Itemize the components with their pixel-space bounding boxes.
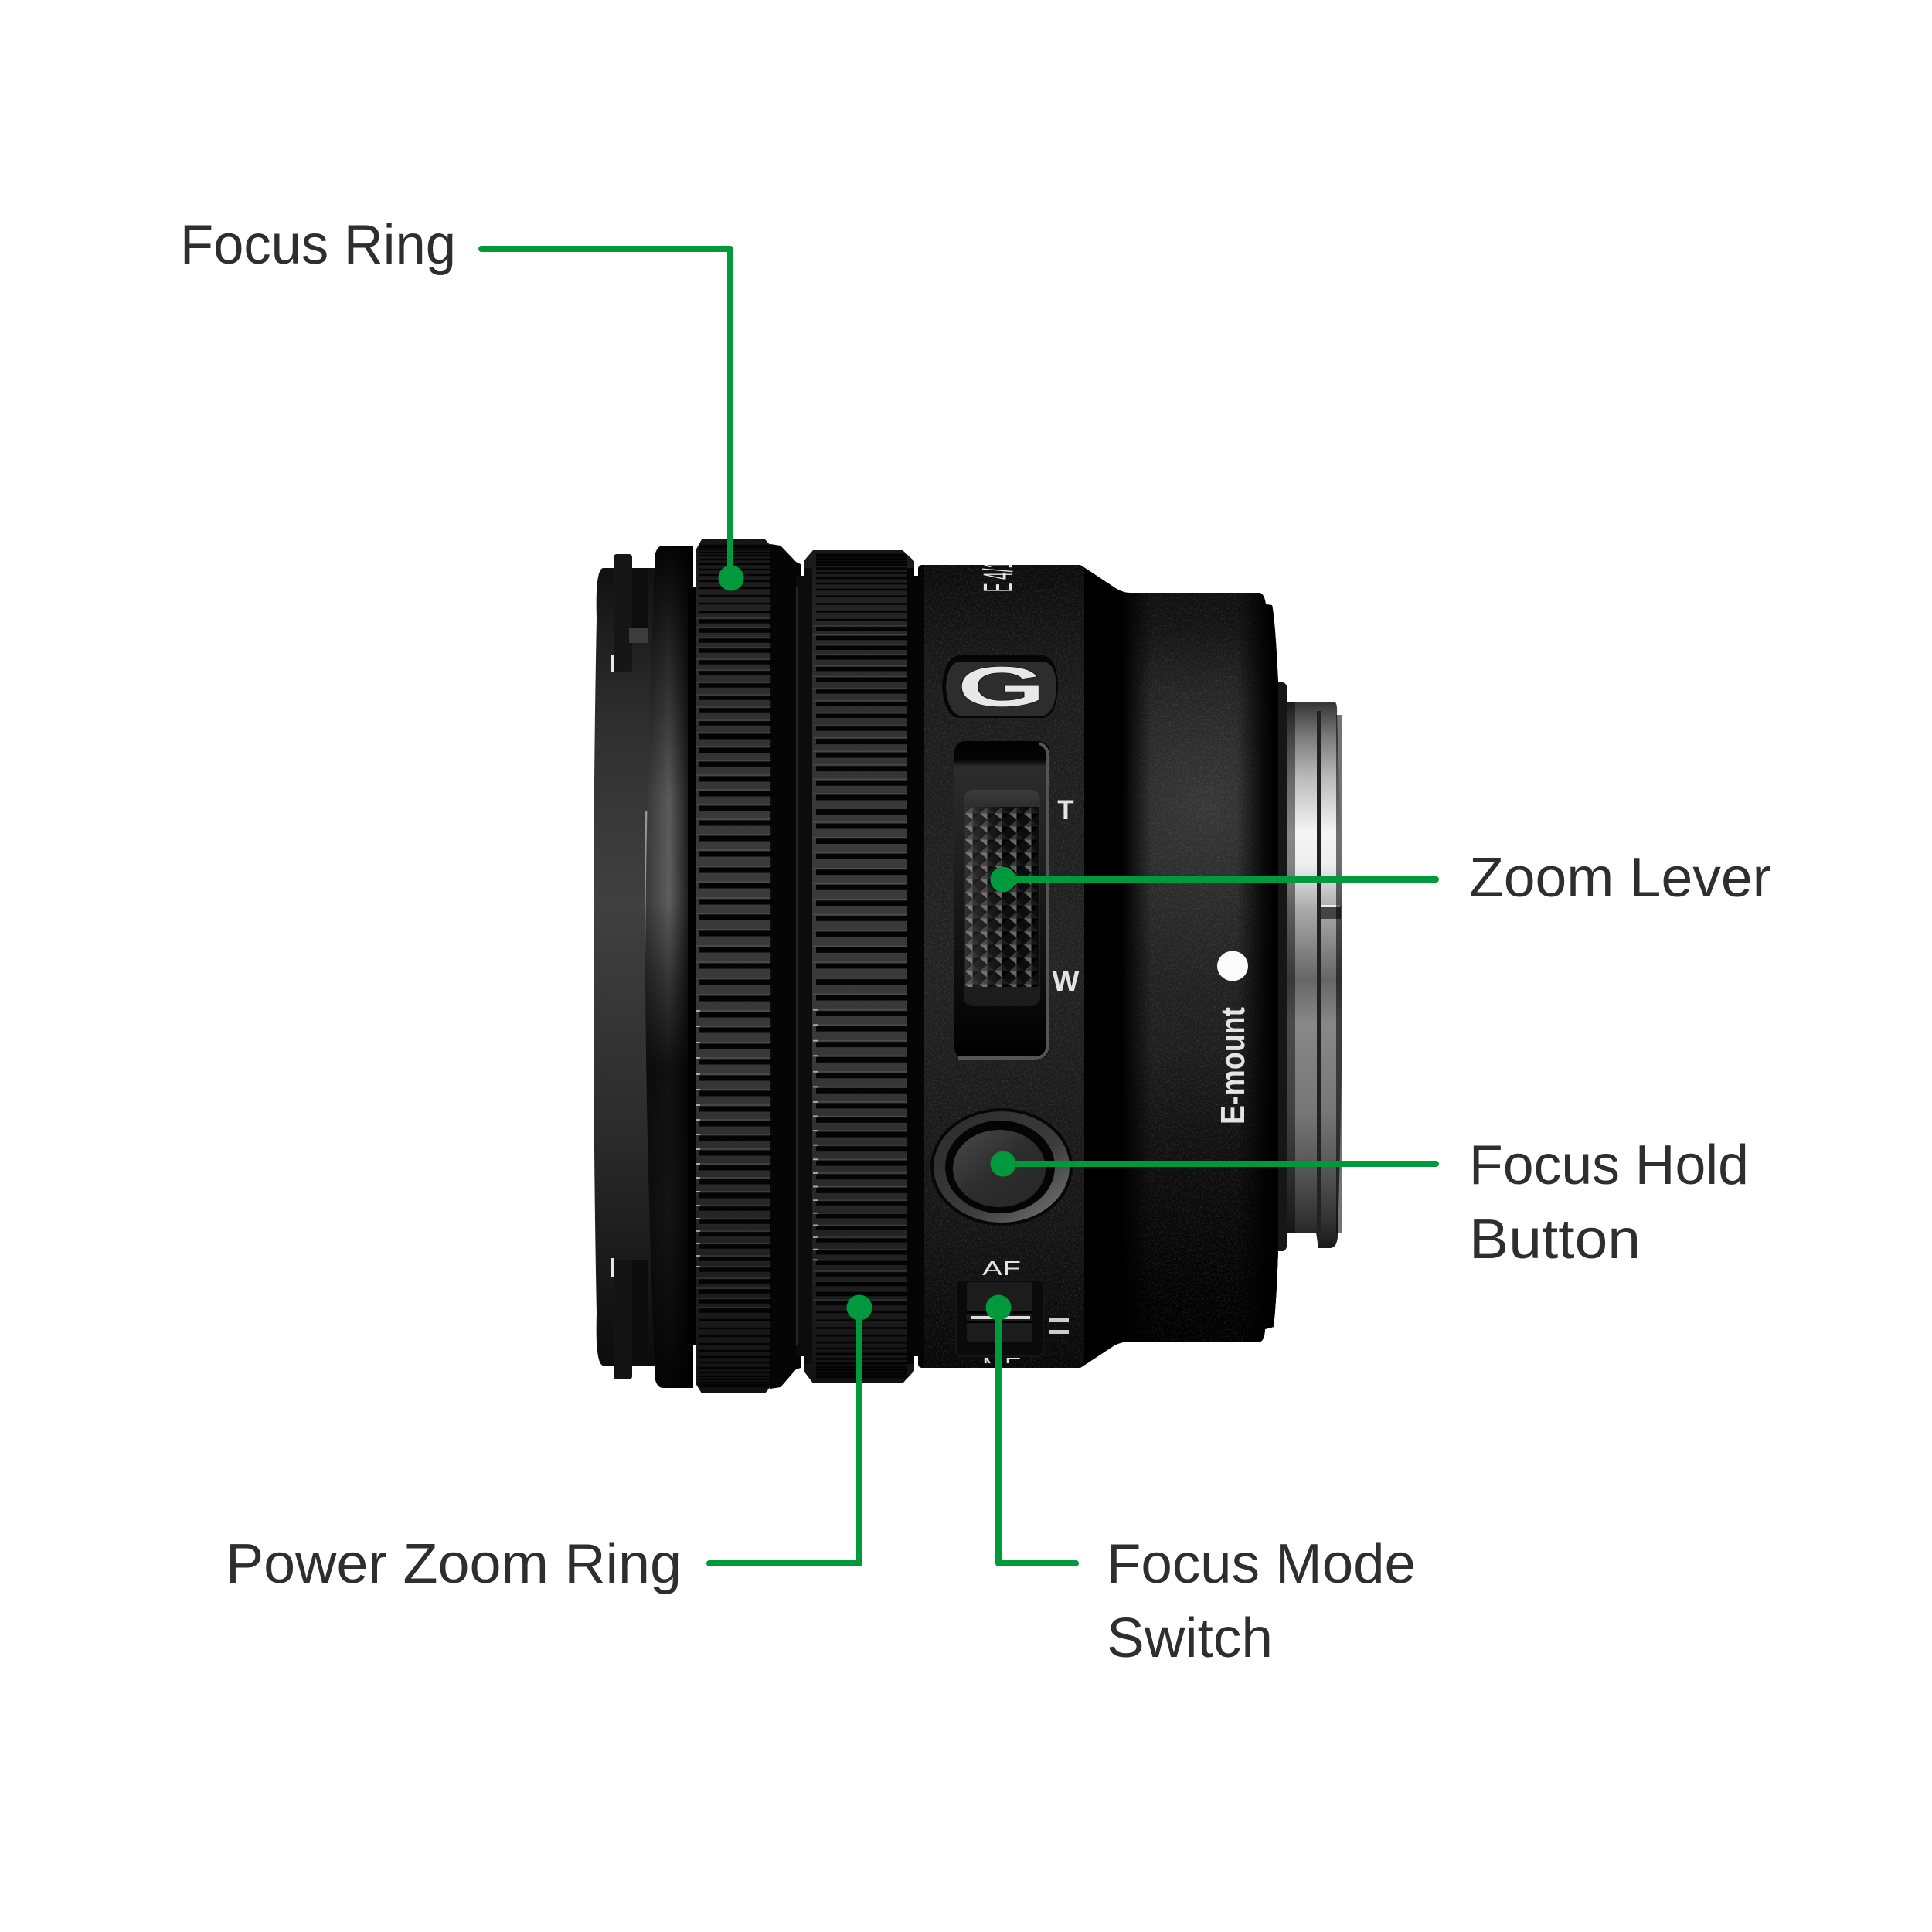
power zoom ring	[801, 547, 917, 1386]
leader line	[1004, 876, 1436, 883]
label: Focus Ring	[180, 214, 456, 276]
marker	[986, 1295, 1011, 1320]
rear lens mount	[1278, 682, 1342, 1251]
lens illustration: E 4/1	[975, 561, 1022, 592]
leader line	[1004, 1161, 1436, 1167]
callout: focus hold button	[991, 1134, 1749, 1270]
marker	[991, 867, 1015, 892]
callout: focus ring	[180, 214, 743, 590]
lever markings T and W: T	[1057, 795, 1074, 825]
lens body	[917, 563, 1281, 1369]
collar between rings	[770, 544, 808, 1389]
label second line: Switch	[1107, 1607, 1273, 1669]
callout: focus mode switch	[986, 1295, 1416, 1669]
lever markings T and W: W	[1053, 965, 1080, 997]
leader line	[709, 1308, 859, 1563]
label: Zoom Lever	[1469, 847, 1771, 909]
focus hold button	[930, 1108, 1073, 1226]
E-mount text: E-mount	[1214, 1007, 1252, 1124]
filter ring	[594, 554, 658, 1379]
label second line: Button	[1469, 1209, 1641, 1270]
focus mode switch: AF	[982, 1257, 1021, 1280]
label: Power Zoom Ring	[226, 1533, 682, 1595]
marker	[719, 566, 743, 590]
marker	[847, 1295, 872, 1320]
marker	[991, 1151, 1015, 1176]
callout: zoom lever	[991, 847, 1771, 909]
focus mode switch: MF	[982, 1353, 1021, 1376]
mount index dot	[1217, 951, 1248, 981]
zoom ring edge highlights	[813, 1009, 818, 1261]
leader line	[481, 249, 730, 578]
focus ring edge highlights	[696, 1010, 700, 1267]
leader line	[998, 1308, 1076, 1563]
zoom lever	[954, 741, 1049, 1059]
focus ring	[696, 539, 771, 1393]
front barrel ring	[645, 546, 693, 1388]
label: Focus Mode	[1107, 1533, 1416, 1595]
lever markings T and W	[1053, 795, 1080, 997]
label: Focus Hold	[1469, 1134, 1749, 1196]
G badge: G	[957, 655, 1046, 719]
callout: power zoom ring	[226, 1295, 872, 1595]
focus mode switch	[955, 1261, 1069, 1363]
lens illustration	[594, 537, 1342, 1396]
